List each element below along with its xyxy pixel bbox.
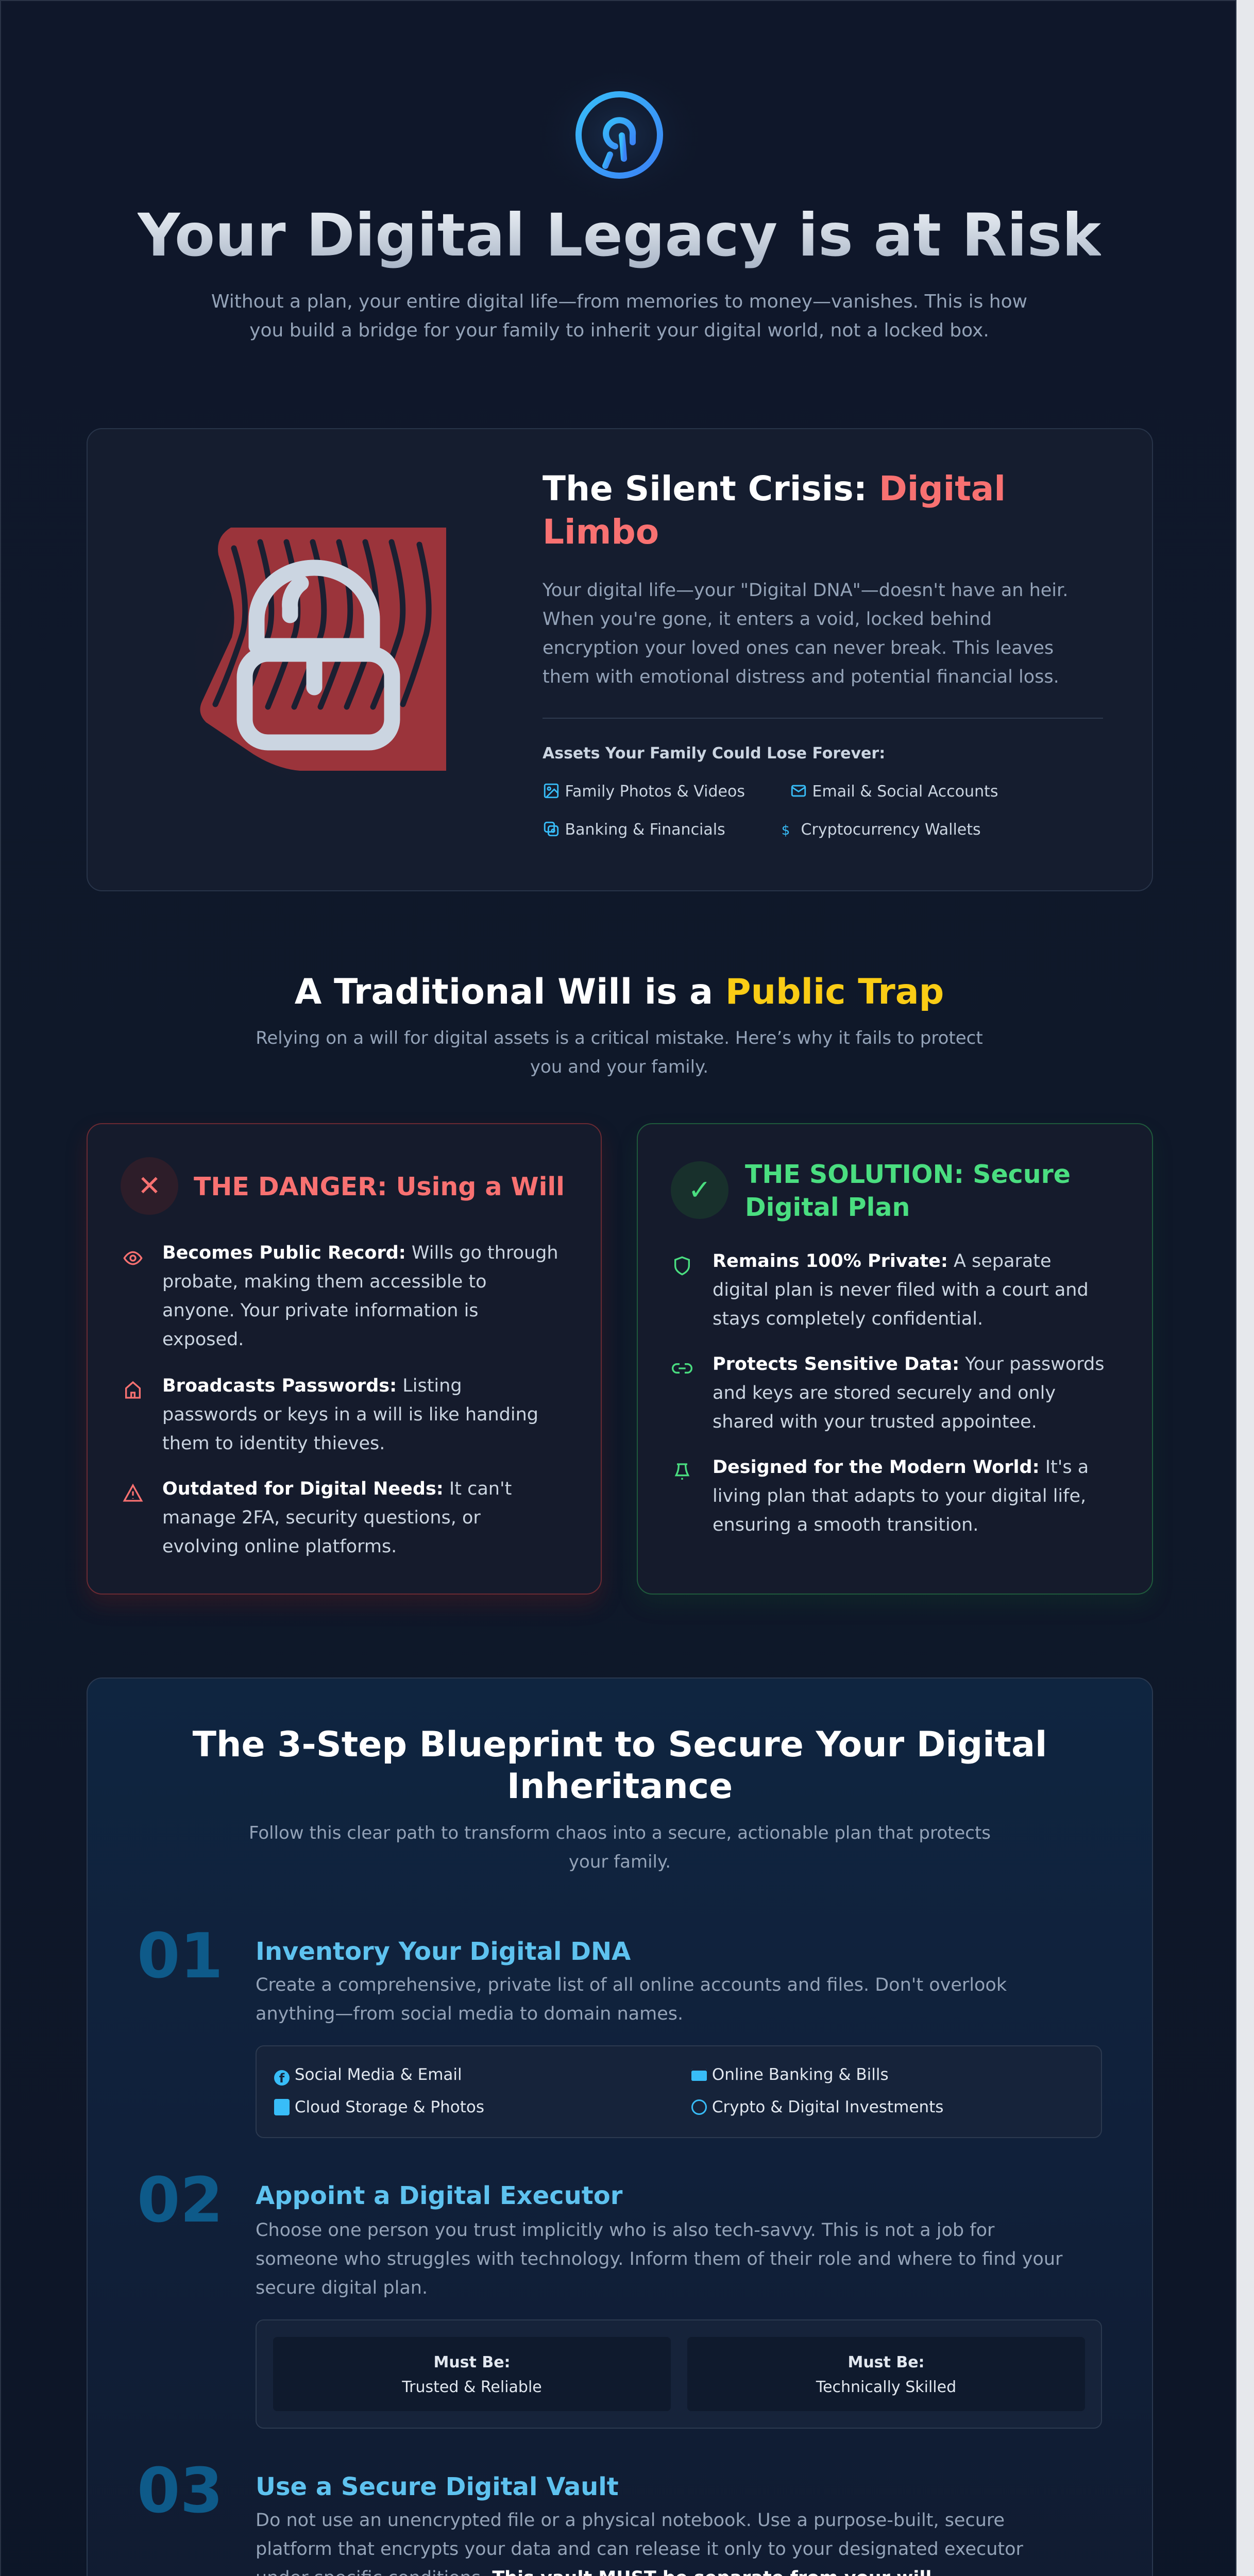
item: public record: exposed. [162, 1329, 244, 1350]
text: will subtitle: you and your family. [530, 1057, 708, 1077]
list: inventory items: Online Banking & Bills [712, 2065, 889, 2084]
item: modern world [675, 1457, 1089, 1535]
list: assets: $ [782, 823, 790, 838]
step text 03: platform that encrypts your data and can release it only to your designated executor [256, 2539, 1023, 2560]
step text 01: Create a comprehensive, private list of all online accounts and files. Don't overlook [256, 1975, 1007, 1995]
number 01: 01 [137, 1921, 223, 1992]
heading: blueprint: The 3-Step Blueprint to Secure Your Digital [193, 1724, 1047, 1765]
text: blueprint subtitle [249, 1823, 991, 1872]
subtitle [211, 291, 1027, 341]
step text 02: secure digital plan. [256, 2278, 428, 2298]
step 02 [137, 2165, 1102, 2429]
text: crisis description [543, 580, 1068, 687]
step text 03 [256, 2506, 1023, 2576]
box: executor traits: Trusted & Reliable [402, 2378, 542, 2396]
subtitle: Without a plan, your entire digital life—from memories to money—vanishes. This is how [211, 291, 1027, 312]
heading: traditional will: A Traditional Will is a Public Trap [295, 972, 944, 1012]
step title 02: Appoint a Digital Executor [256, 2181, 622, 2210]
panel: silent crisis [87, 428, 1153, 891]
number 02: 02 [137, 2165, 223, 2236]
item: modern world: ensuring a smooth transition. [713, 1515, 978, 1535]
list: assets: Banking & Financials [565, 821, 725, 839]
list: assets: Email & Social Accounts [812, 783, 998, 801]
list: assets [544, 783, 998, 839]
item: public record: Becomes Public Record: Wills go through [162, 1243, 558, 1263]
heading: silent crisis: Limbo [543, 512, 659, 552]
step title 01: Inventory Your Digital DNA [256, 1937, 631, 1966]
item: sensitive data: Protects Sensitive Data: Your passwords [713, 1354, 1104, 1375]
text: crisis description: them with emotional distress and potential financial loss. [543, 667, 1059, 687]
box: executor traits [256, 2319, 1102, 2429]
step 03 [137, 2455, 1106, 2576]
step text 01: anything—from social media to domain names. [256, 2004, 683, 2024]
item: passwords [125, 1376, 538, 1454]
box: executor traits: Must Be: [848, 2353, 925, 2371]
item: modern world: living plan that adapts to your digital life, [713, 1486, 1086, 1506]
heading: solution [745, 1160, 1071, 1222]
text: will subtitle [256, 1028, 983, 1077]
item: outdated: Outdated for Digital Needs: It can't [162, 1479, 512, 1499]
item: sensitive data: and keys are stored securely and only [713, 1383, 1056, 1403]
panel: danger [87, 1123, 602, 1595]
list: inventory items: Social Media & Email [295, 2065, 462, 2084]
item: private [674, 1251, 1089, 1329]
step text 02 [256, 2220, 1062, 2298]
heading: silent crisis: The Silent Crisis: Digital [543, 469, 1006, 509]
icon: check circle [671, 1161, 728, 1219]
item: private: stays completely confidential. [713, 1309, 983, 1329]
icon: broken lock graphic [200, 528, 446, 771]
item: passwords: passwords or keys in a will is like handing [162, 1404, 538, 1425]
item: outdated: manage 2FA, security questions, or [162, 1507, 481, 1528]
item: public record: probate, making them accessible to [162, 1272, 487, 1292]
step text 02: someone who struggles with technology. Inform them of their role and where to find your [256, 2249, 1062, 2269]
box: executor traits: Technically Skilled [816, 2378, 956, 2396]
number 03: 03 [137, 2455, 223, 2527]
list: inventory items: Crypto & Digital Investments [712, 2098, 943, 2116]
item: public record [124, 1243, 558, 1350]
panel: 3-step blueprint [87, 1677, 1153, 2576]
heading: blueprint: Inheritance [507, 1766, 733, 1807]
step text 02: Choose one person you trust implicitly who is also tech-savvy. This is not a job for [256, 2220, 994, 2241]
text: will subtitle: Relying on a will for digital assets is a critical mistake. Here’s why it fails to protect [256, 1028, 983, 1048]
item: private: digital plan is never filed with a court and [713, 1280, 1089, 1300]
icon: x circle [121, 1157, 178, 1215]
subtitle: you build a bridge for your family to inherit your digital world, not a locked box. [249, 320, 989, 341]
text: crisis description: When you're gone, it enters a void, locked behind [543, 609, 992, 630]
item: private: Remains 100% Private: A separate [713, 1251, 1052, 1272]
list: assets: Cryptocurrency Wallets [801, 821, 981, 839]
item: public record: anyone. Your private information is [162, 1300, 479, 1321]
title: Your Digital Legacy is at Risk [138, 201, 1101, 269]
item: passwords: Broadcasts Passwords: Listing [162, 1376, 462, 1396]
text: assets heading: Assets Your Family Could Lose Forever: [543, 744, 885, 762]
box: executor traits: Must Be: [433, 2353, 511, 2371]
list: inventory items: f [279, 2071, 284, 2086]
list: assets: Family Photos & Videos [565, 783, 745, 801]
text: crisis description: Your digital life—your "Digital DNA"—doesn't have an heir. [543, 580, 1068, 601]
text: blueprint subtitle: your family. [569, 1852, 671, 1872]
heading: blueprint [193, 1724, 1047, 1807]
list: inventory items [256, 2045, 1102, 2138]
item: sensitive data: shared with your trusted appointee. [713, 1412, 1037, 1432]
heading: silent crisis [543, 469, 1006, 552]
item: outdated [123, 1479, 512, 1557]
step 01 [137, 1921, 1102, 2138]
step title 03: Use a Secure Digital Vault [256, 2472, 619, 2501]
icon: check circle: ✓ [688, 1174, 711, 1206]
item: modern world: Designed for the Modern World: It's a [713, 1457, 1089, 1478]
text: blueprint subtitle: Follow this clear path to transform chaos into a secure, actionable plan that protects [249, 1823, 991, 1843]
text: crisis description: encryption your loved ones can never break. This leaves [543, 638, 1054, 658]
item: passwords: them to identity thieves. [162, 1433, 385, 1454]
item: sensitive data [672, 1354, 1104, 1432]
panel: solution [637, 1123, 1153, 1595]
heading: danger: THE DANGER: Using a Will [194, 1172, 565, 1201]
step text 03: Do not use an unencrypted file or a physical notebook. Use a purpose-built, secure [256, 2510, 1005, 2531]
icon: x circle: ✕ [138, 1170, 161, 1202]
list: inventory items: Cloud Storage & Photos [295, 2098, 484, 2116]
heading: solution: THE SOLUTION: Secure [745, 1160, 1071, 1189]
step text 01 [256, 1975, 1007, 2024]
icon: fingerprint logo [575, 91, 663, 179]
item: outdated: evolving online platforms. [162, 1536, 397, 1557]
heading: solution: Digital Plan [745, 1193, 910, 1222]
